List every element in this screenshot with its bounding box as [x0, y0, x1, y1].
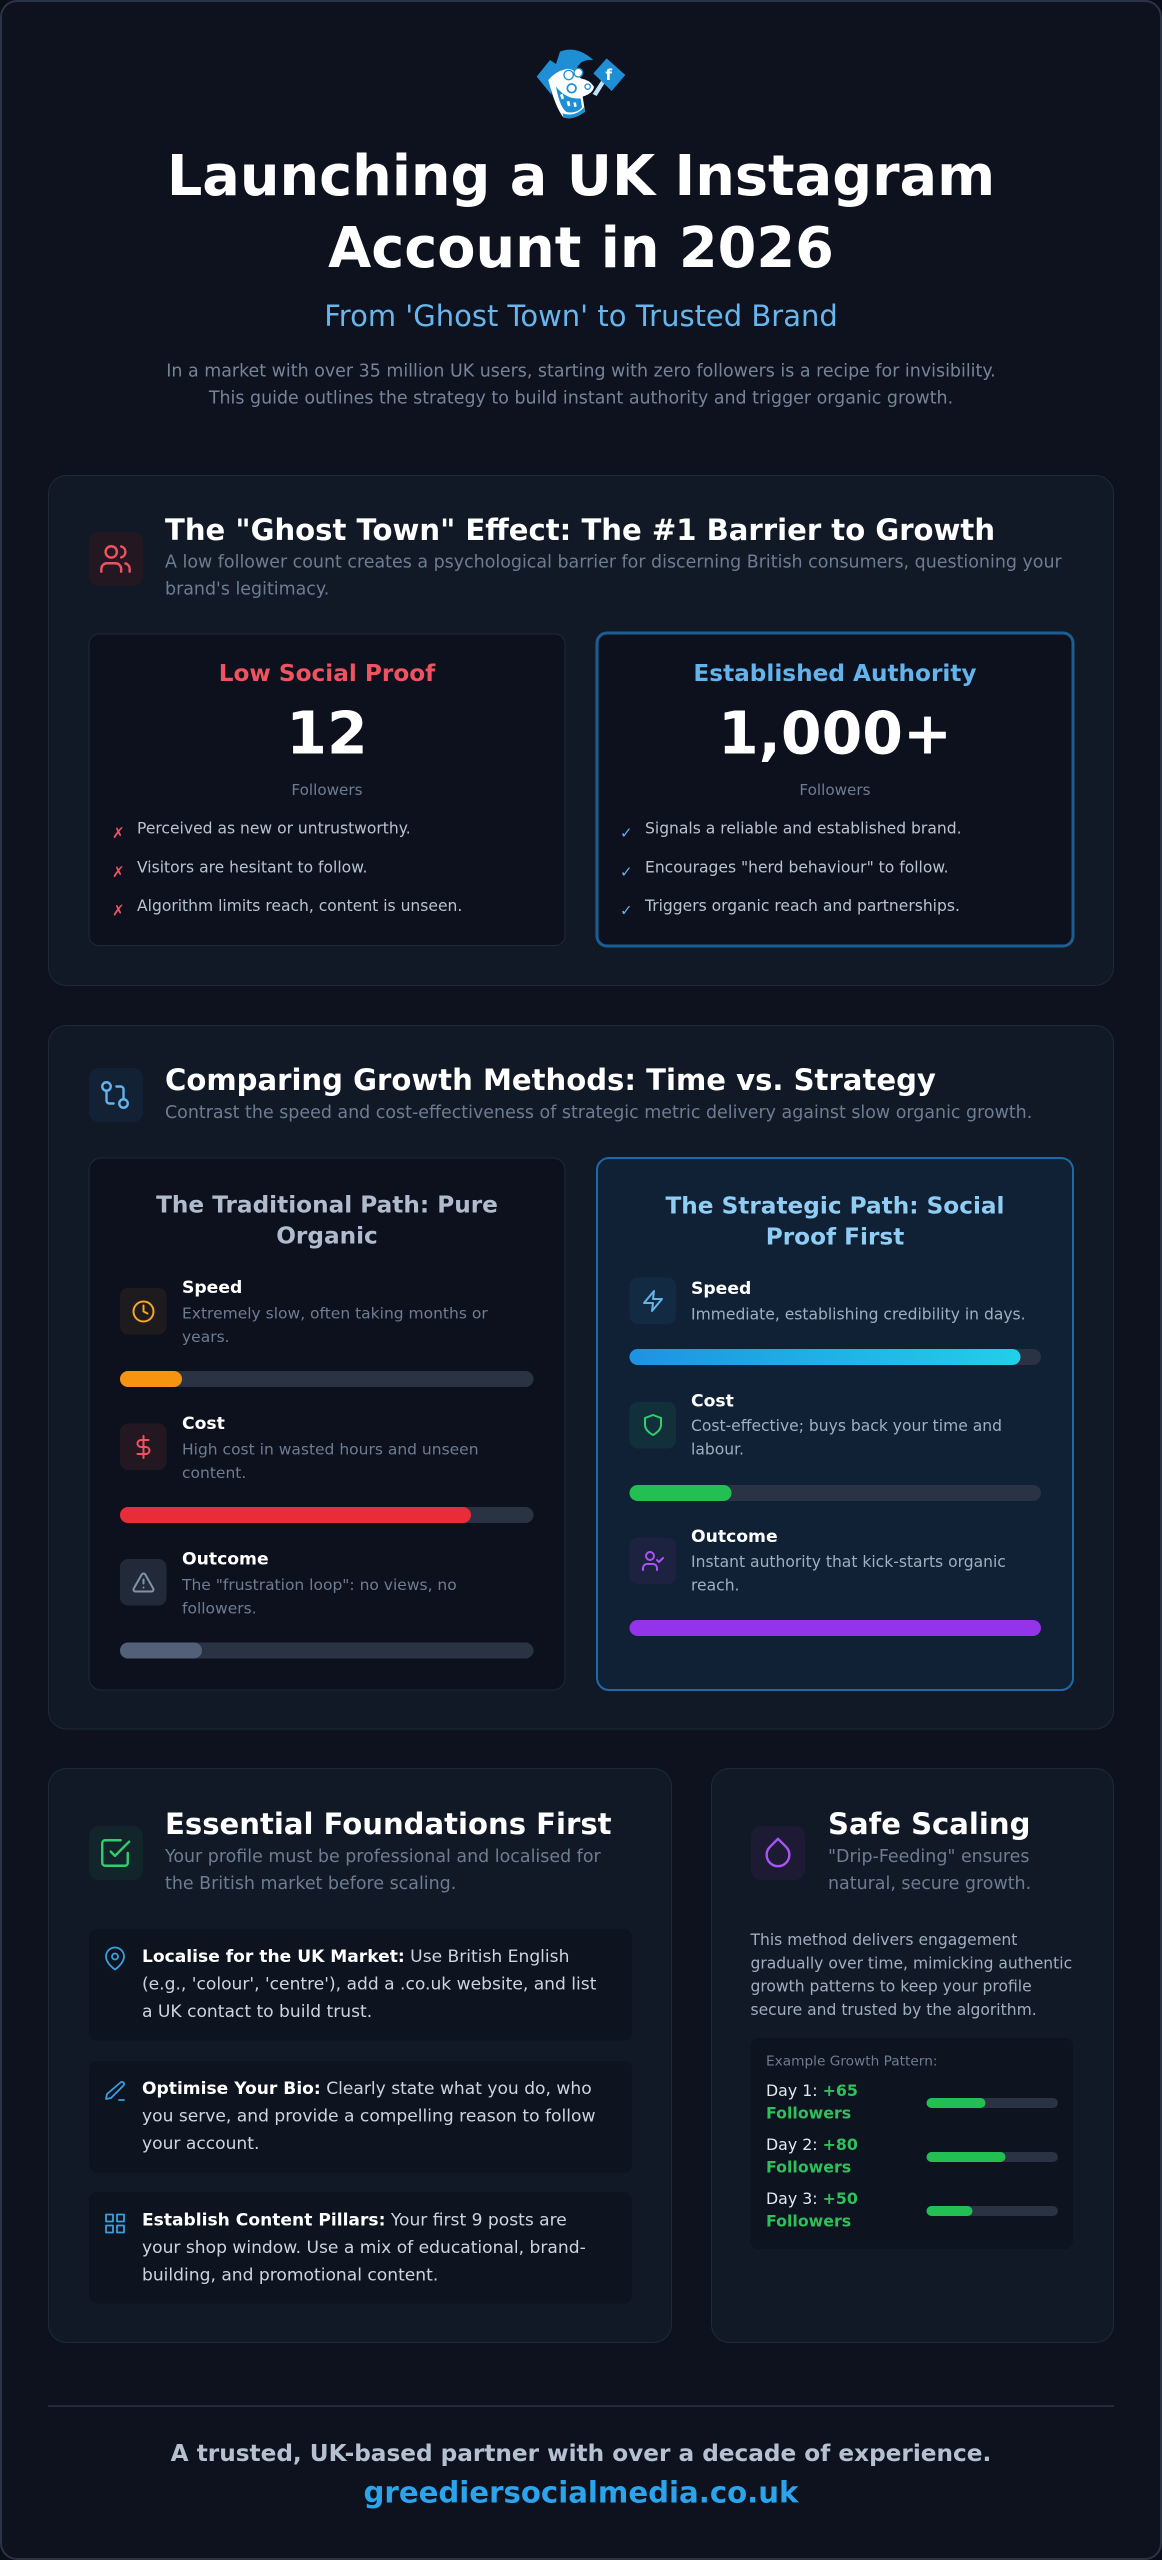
- heading: Essential Foundations First: [165, 1807, 612, 1841]
- title: [167, 144, 995, 281]
- description: the British market before scaling.: [165, 1874, 456, 1894]
- description: A low follower count creates a psychological barrier for discerning British consumers, questioning your: [165, 552, 1063, 572]
- day 1: [766, 2081, 1058, 2122]
- panel: safe scaling: [712, 1768, 1114, 2342]
- paragraph: growth patterns to keep your profile: [750, 1978, 1032, 1996]
- card: established authority: Triggers organic reach and partnerships.: [644, 897, 960, 915]
- row: speed: [120, 1278, 534, 1387]
- paragraph: [750, 1931, 1072, 2019]
- title: Launching a UK Instagram: [167, 144, 995, 209]
- card: established authority: [597, 633, 1073, 946]
- item: localise: Localise for the UK Market: Use British English: [142, 1947, 569, 1967]
- item: content pillars: your shop window. Use a mix of educational, brand-: [142, 2238, 586, 2258]
- day 3: Day 3: +50: [766, 2189, 858, 2208]
- row: outcome: followers.: [182, 1600, 257, 1618]
- row: outcome: [120, 1550, 534, 1658]
- item: bio: Optimise Your Bio: Clearly state what you do, who: [142, 2079, 592, 2099]
- item: bio: your account.: [142, 2134, 259, 2154]
- card title: Proof First: [766, 1224, 904, 1250]
- item: localise: (e.g., 'colour', 'centre'), add a .co.uk website, and list: [142, 1974, 597, 1994]
- card: low social proof: [89, 634, 565, 946]
- paragraph: gradually over time, mimicking authentic: [750, 1954, 1072, 1972]
- intro text: In a market with over 35 million UK users, starting with zero followers is a recipe for invisibility.: [166, 362, 996, 382]
- card: low social proof: ✗: [112, 902, 125, 920]
- item: content pillars: Establish Content Pillars: Your first 9 posts are: [142, 2210, 567, 2230]
- row: cost: Cost: [182, 1414, 225, 1434]
- intro text: [166, 362, 996, 408]
- day 1: Day 1: +65: [766, 2081, 858, 2100]
- day 2: [766, 2135, 1058, 2176]
- row: outcome: The "frustration loop": no views, no: [181, 1576, 457, 1594]
- description: Your profile must be professional and localised for: [164, 1847, 601, 1867]
- heading: Comparing Growth Methods: Time vs. Strategy: [165, 1063, 936, 1097]
- row: cost: High cost in wasted hours and unseen: [182, 1440, 479, 1458]
- item: localise: [89, 1929, 632, 2040]
- card: low social proof: 12: [286, 700, 368, 768]
- card: strategic path: [597, 1158, 1073, 1690]
- row: speed: Speed: [182, 1278, 242, 1298]
- intro text: This guide outlines the strategy to build instant authority and trigger organic growth.: [208, 388, 953, 408]
- day 2: Day 2: +80: [766, 2135, 858, 2154]
- paragraph: This method delivers engagement: [750, 1931, 1017, 1949]
- description: "Drip-Feeding" ensures: [828, 1847, 1029, 1867]
- logo mascot: f: [605, 66, 612, 84]
- row: outcome: reach.: [691, 1576, 740, 1594]
- description: Contrast the speed and cost-effectiveness of strategic metric delivery against slow organic growth.: [165, 1103, 1032, 1123]
- subtitle: From 'Ghost Town' to Trusted Brand: [324, 299, 838, 333]
- panel: ghost town effect: [48, 476, 1114, 986]
- card: established authority: ✓: [620, 824, 633, 842]
- card: established authority: Signals a reliable and established brand.: [645, 820, 962, 838]
- card: low social proof: Perceived as new or untrustworthy.: [137, 820, 411, 838]
- heading: Safe Scaling: [828, 1807, 1030, 1841]
- row: cost: Cost: [691, 1392, 734, 1412]
- card title: [156, 1192, 498, 1250]
- card: established authority: ✓: [620, 902, 633, 920]
- row: speed: Extremely slow, often taking months or: [182, 1304, 488, 1322]
- card: low social proof: Followers: [291, 781, 363, 799]
- card title: The Traditional Path: Pure: [156, 1192, 498, 1218]
- paragraph: secure and trusted by the algorithm.: [750, 2001, 1037, 2019]
- icon: users: [89, 532, 143, 586]
- row: outcome: [630, 1527, 1041, 1636]
- icon: git compare: [89, 1068, 143, 1122]
- description: [165, 552, 1063, 600]
- logo mascot: [537, 50, 625, 118]
- item: content pillars: [89, 2192, 632, 2304]
- item: bio: [89, 2061, 632, 2172]
- icon: droplet: [751, 1826, 805, 1880]
- card: established authority: Followers: [799, 781, 871, 799]
- description: [164, 1847, 601, 1894]
- row: outcome: Outcome: [182, 1550, 269, 1570]
- card: established authority: 1,000+: [718, 700, 952, 768]
- panel: comparing growth methods: [48, 1026, 1114, 1729]
- item: bio: you serve, and provide a compelling reason to follow: [142, 2106, 595, 2126]
- card: established authority: ✓: [620, 863, 633, 881]
- row: outcome: Outcome: [691, 1527, 778, 1547]
- row: speed: years.: [182, 1328, 230, 1346]
- header: [166, 50, 996, 408]
- card title: [665, 1192, 1005, 1250]
- card title: Organic: [276, 1222, 378, 1250]
- row: cost: [120, 1414, 534, 1523]
- item: localise: a UK contact to build trust.: [142, 2002, 372, 2022]
- description: natural, secure growth.: [828, 1874, 1031, 1894]
- panel: essential foundations: [48, 1768, 672, 2342]
- row: speed: Speed: [691, 1279, 751, 1299]
- row: cost: labour.: [691, 1440, 744, 1458]
- heading: The "Ghost Town" Effect: The #1 Barrier to Growth: [165, 513, 995, 547]
- card: established authority: Established Authority: [693, 660, 977, 687]
- card: low social proof: Algorithm limits reach, content is unseen.: [137, 897, 462, 915]
- day 3: Followers: [766, 2212, 851, 2230]
- card: low social proof: ✗: [112, 863, 125, 881]
- card: low social proof: ✗: [112, 824, 125, 842]
- card title: The Strategic Path: Social: [665, 1192, 1005, 1220]
- title: Account in 2026: [328, 216, 834, 281]
- description: [828, 1847, 1031, 1894]
- day 2: Followers: [766, 2158, 851, 2176]
- description: brand's legitimacy.: [165, 580, 329, 600]
- row: outcome: Instant authority that kick-starts organic: [691, 1553, 1006, 1571]
- row: cost: content.: [182, 1464, 246, 1482]
- day 1: Followers: [766, 2104, 851, 2122]
- example growth pattern chart: Example Growth Pattern:: [766, 2054, 937, 2070]
- card: traditional path: [89, 1158, 565, 1690]
- card: low social proof: Low Social Proof: [219, 660, 436, 687]
- row: cost: Cost-effective; buys back your time and: [691, 1417, 1002, 1435]
- example growth pattern chart: [750, 2038, 1073, 2249]
- card: low social proof: Visitors are hesitant to follow.: [137, 858, 367, 876]
- row: speed: Immediate, establishing credibility in days.: [691, 1306, 1026, 1324]
- footer: [171, 2440, 991, 2510]
- footer: A trusted, UK-based partner with over a decade of experience.: [171, 2440, 991, 2467]
- item: content pillars: building, and promotional content.: [142, 2266, 438, 2286]
- row: speed: [630, 1278, 1041, 1365]
- row: cost: [630, 1392, 1041, 1501]
- day 3: [766, 2189, 1058, 2230]
- icon: check square: [89, 1826, 143, 1880]
- card: established authority: Encourages "herd behaviour" to follow.: [645, 858, 949, 876]
- footer: greediersocialmedia.co.uk: [364, 2476, 799, 2510]
